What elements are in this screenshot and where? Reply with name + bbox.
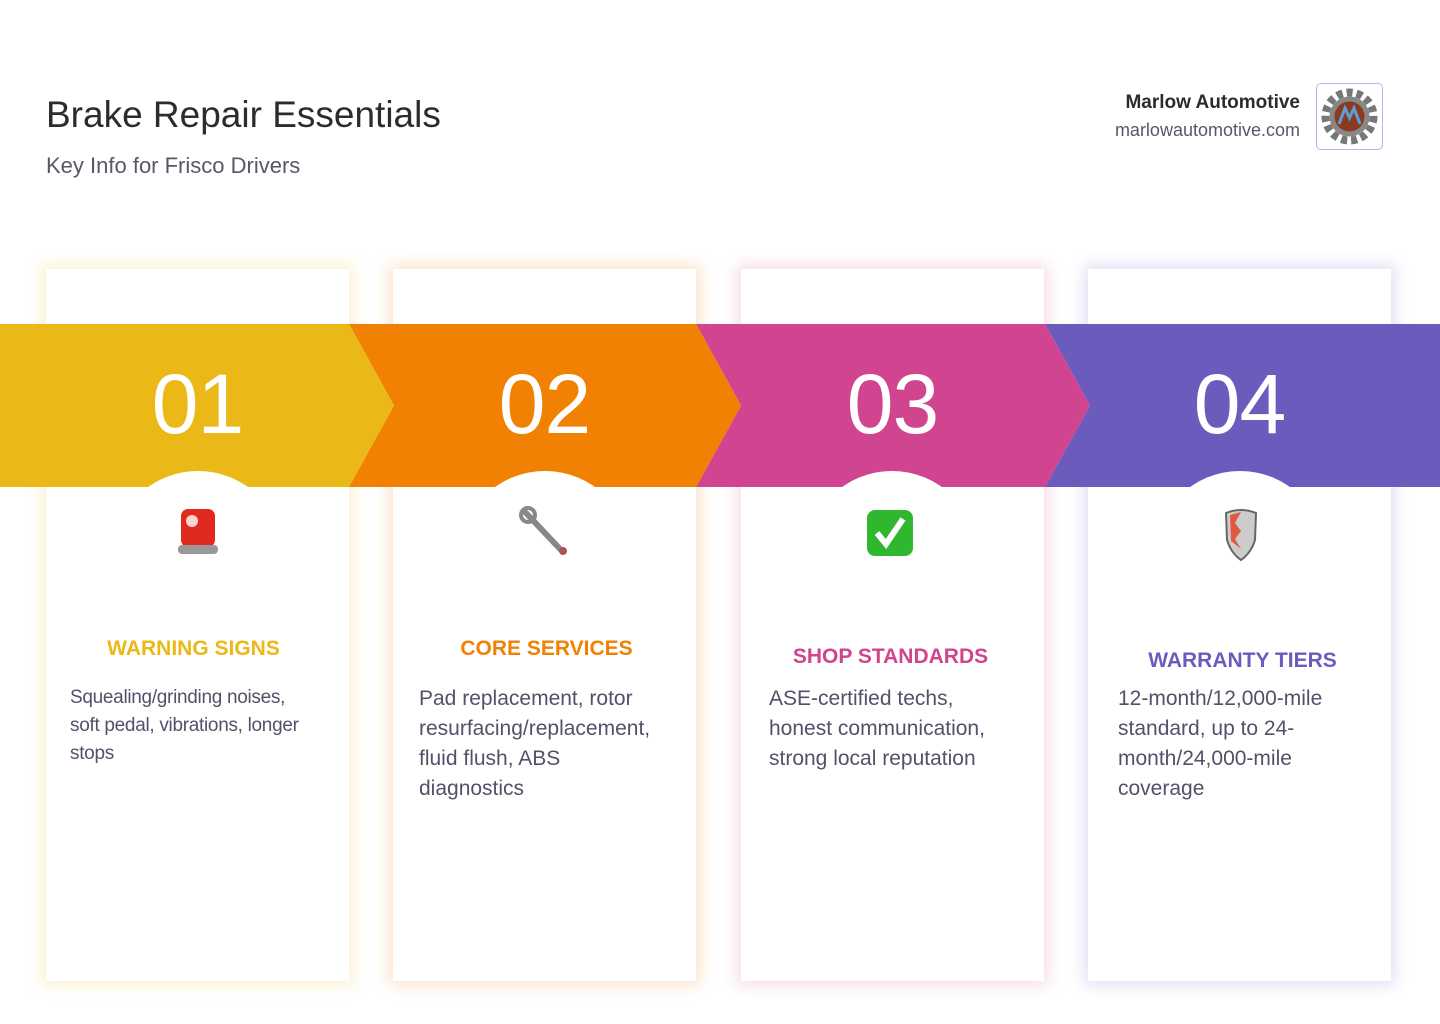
card 3 text: SHOP STANDARDS — [793, 645, 988, 668]
title: Brake Repair Essentials — [46, 94, 441, 135]
text: 12-month/12,000-mile standard, up to 24-month/24,000-mile coverage — [1118, 687, 1322, 800]
text: Pad replacement, rotor resurfacing/replacement, fluid flush, ABS diagnostics — [419, 687, 650, 800]
logo — [1316, 83, 1383, 150]
text: stops — [70, 743, 114, 764]
card 4 text: WARRANTY TIERS — [1148, 649, 1337, 672]
brand text: Marlow Automotive — [1125, 92, 1300, 113]
card glows / cards — [46, 269, 349, 981]
brand text: marlowautomotive.com — [1115, 120, 1300, 140]
icon: shield — [1225, 509, 1257, 562]
text: 03 — [847, 357, 938, 451]
subtitle: Key Info for Frisco Drivers — [46, 153, 300, 178]
text: Squealing/grinding noises, — [70, 687, 285, 708]
icon: siren — [178, 509, 218, 554]
text: ASE-certified techs, honest communication, strong local reputation — [769, 687, 985, 770]
card 1 text: WARNING SIGNS — [107, 637, 280, 660]
banner arrows — [0, 324, 1440, 487]
icon: check — [867, 510, 913, 556]
text: 02 — [499, 357, 590, 451]
bumps — [148, 471, 248, 487]
text: 04 — [1194, 357, 1285, 451]
card 2 text: CORE SERVICES — [460, 637, 633, 660]
numbers: 01 — [152, 357, 243, 451]
icon: wrench — [519, 506, 567, 555]
text: soft pedal, vibrations, longer — [70, 715, 299, 736]
brand text — [1115, 92, 1300, 140]
